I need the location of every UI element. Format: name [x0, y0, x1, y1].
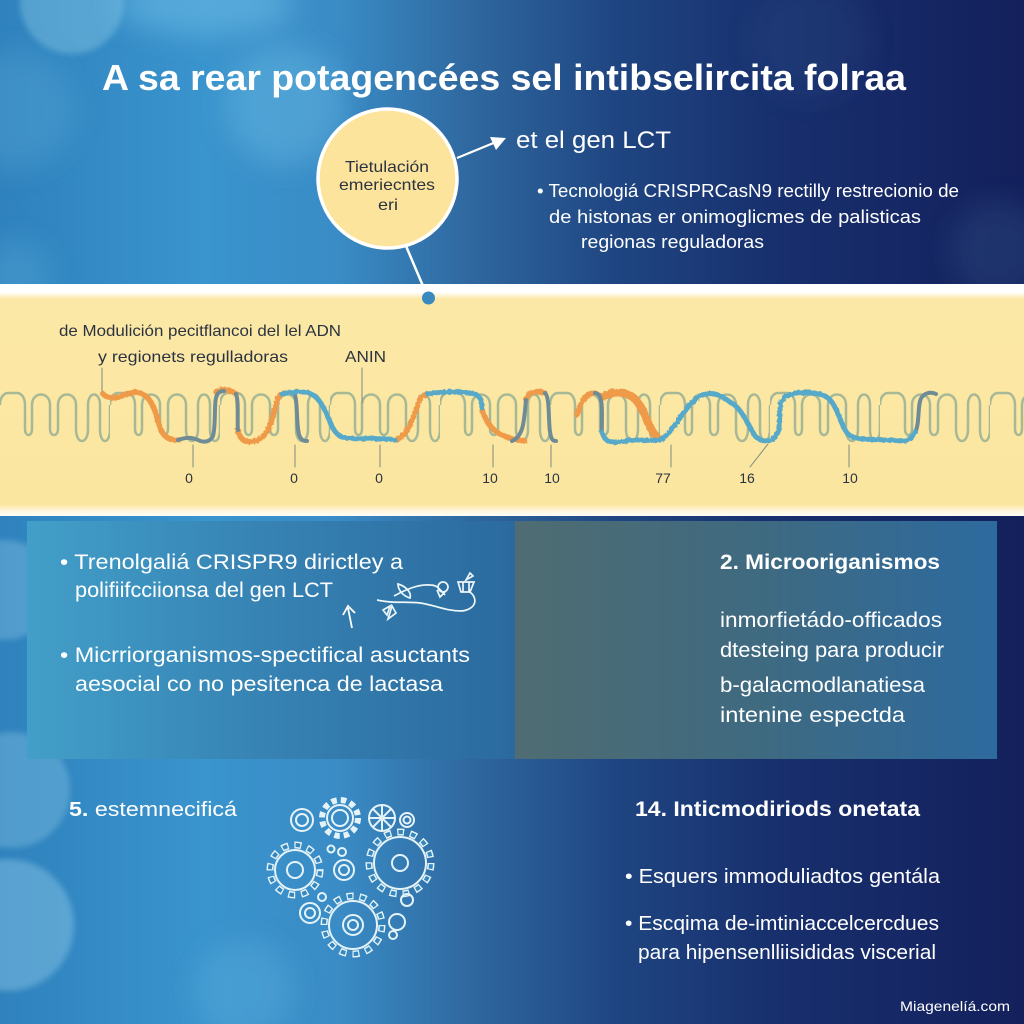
panel text: bullet two: • Micrriorganismos-spectifical asuctants: [60, 644, 470, 667]
heading: gen LCT: et el gen LCT: [516, 127, 671, 154]
panel text: intenine espectda: [720, 704, 905, 727]
text block: schemes: para hipensenlliisididas viscerial: [638, 942, 936, 964]
callout circle: Tietulación: [345, 159, 429, 176]
axis value 10: 10: [544, 470, 560, 486]
icon: gears: [270, 800, 431, 954]
heading: section 5: 5. estemnecificá: [69, 799, 238, 821]
icon: plant sketch: [377, 573, 475, 619]
heading: section 14: 14. Inticmodiriods onetata: [635, 798, 920, 821]
text block: schemes: • Esquers immoduliadtos gentála: [625, 866, 941, 888]
text block: CRISPR technology: regionas reguladoras: [581, 232, 764, 252]
connector line and dot: [406, 246, 435, 304]
panel text: bullet two: [60, 644, 470, 696]
panel text: [720, 609, 944, 727]
yellow DNA band: [0, 284, 1024, 516]
axis value 0: 0: [290, 470, 298, 486]
footer credit: Miagenelíá.com: [900, 998, 1010, 1014]
text block: CRISPR technology: [537, 181, 959, 252]
title: A sa rear potagencées sel intibselircita folraa: [102, 57, 907, 98]
icon: up arrow: [343, 606, 355, 628]
panel text: b-galacmodlanatiesa: [720, 674, 925, 697]
axis value 0: 0: [375, 470, 383, 486]
panel text: bullet two: aesocial co no pesitenca de lactasa: [75, 673, 443, 696]
band text: modulation label: de Modulición pecitflancoi del lel ADN: [59, 323, 341, 340]
band text: modulation label: [59, 323, 341, 366]
panel heading: 2. Microoriganismos: [720, 551, 940, 574]
text block: CRISPR technology: de histonas er onimoglicmes de palisticas: [549, 207, 921, 227]
axis value 10: 10: [482, 470, 498, 486]
text block: schemes: [625, 866, 941, 964]
panel text: bullet one: polifiifcciionsa del gen LCT: [75, 579, 333, 602]
axis value 16: 16: [739, 470, 755, 486]
panel: microorganisms: [515, 521, 997, 759]
callout circle: [318, 109, 457, 248]
panel text: dtesteing para producir: [720, 639, 944, 662]
axis value 77: 77: [655, 470, 671, 486]
panel text: bullet one: • Trenolgaliá CRISPR9 dirictley a: [60, 551, 403, 574]
band text: modulation label: y regionets regulladoras: [98, 349, 288, 366]
chart: DNA strand: [0, 368, 1024, 486]
panel text: inmorfietádo-officados: [720, 609, 942, 632]
callout circle: eri: [378, 197, 398, 214]
band text: ANIN label: ANIN: [345, 349, 386, 366]
text block: schemes: • Escqima de-imtiniaccelcercdues: [625, 913, 939, 935]
axis value 0: 0: [185, 470, 193, 486]
callout circle: emeriecntes: [339, 177, 435, 194]
text block: CRISPR technology: • Tecnologiá CRISPRCasN9 rectilly restrecionio de: [537, 181, 959, 201]
panel: CRISPR: [27, 521, 515, 759]
panel text: bullet one: [60, 551, 403, 602]
arrow to gene label: [457, 137, 506, 158]
axis value 10: 10: [842, 470, 858, 486]
